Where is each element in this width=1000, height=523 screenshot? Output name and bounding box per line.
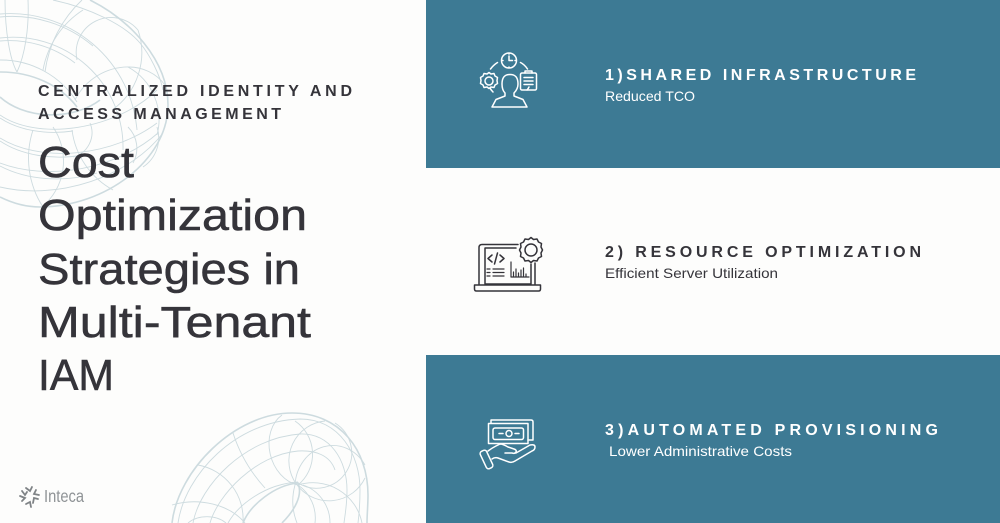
title: IAM bbox=[38, 351, 114, 400]
panel: resource optimization bbox=[474, 238, 921, 291]
panel: shared infrastructure bbox=[426, 0, 1000, 168]
logo: Inteca: Inteca bbox=[44, 486, 84, 506]
decorative wireframe torus: top left bbox=[0, 0, 168, 207]
label: shared infrastructure: 1)SHARED INFRASTRUCTURE bbox=[605, 67, 916, 84]
eyebrow heading: CENTRALIZED IDENTITY AND bbox=[38, 83, 352, 100]
title: Strategies in bbox=[38, 245, 300, 294]
title bbox=[38, 138, 311, 400]
text: efficient server utilization: Efficient Server Utilization bbox=[605, 265, 778, 281]
icon: hand holding banknotes bbox=[479, 420, 535, 470]
title: Multi-Tenant bbox=[38, 298, 311, 347]
icon: person with gear, clock and clipboard bbox=[480, 53, 536, 107]
text: reduced TCO: Reduced TCO bbox=[605, 88, 695, 104]
decorative wireframe torus: bottom centre bbox=[172, 413, 368, 523]
label: resource optimization: 2) RESOURCE OPTIMIZATION bbox=[605, 244, 921, 261]
logo: Inteca bbox=[20, 486, 84, 507]
title: Cost bbox=[38, 138, 134, 187]
title: Optimization bbox=[38, 191, 307, 240]
icon: laptop with gear bbox=[474, 238, 542, 291]
text: lower administrative costs: Lower Administrative Costs bbox=[609, 443, 792, 459]
eyebrow heading: ACCESS MANAGEMENT bbox=[38, 106, 281, 123]
icon: logo star bbox=[20, 487, 39, 507]
panel: automated provisioning bbox=[426, 355, 1000, 523]
eyebrow heading bbox=[38, 83, 352, 123]
label: automated provisioning: 3)AUTOMATED PROVISIONING bbox=[605, 422, 938, 439]
